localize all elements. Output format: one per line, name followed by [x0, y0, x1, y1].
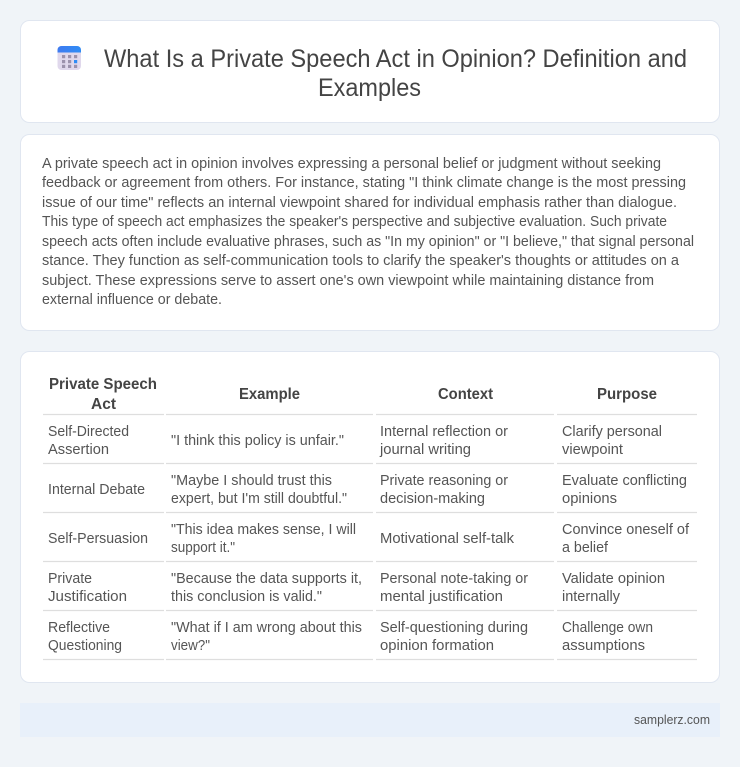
table row: Internal Debate: Private reasoning or: [380, 473, 508, 489]
footer bar: [20, 703, 720, 737]
table row: Self-Directed Assertion: "I think this policy is unfair.": [171, 433, 344, 449]
paragraph text: external influence or debate.: [42, 292, 222, 308]
icon: calendar: [58, 46, 81, 70]
panel: table: [20, 352, 720, 682]
paragraph text: feedback or agreement from others. For instance, stating "I think climate change is the most pressing: [42, 175, 686, 191]
paragraph text: This type of speech act emphasizes the speaker's perspective and subjective evaluation. Such private: [42, 214, 667, 230]
paragraph text: issue of our time" reflects an internal viewpoint shared for individual emphasis rather than dialogue.: [42, 195, 677, 211]
table row: Private Justification: mental justification: [380, 589, 503, 605]
table row: Internal Debate: expert, but I'm still doubtful.": [171, 491, 347, 507]
table header: Purpose: [597, 386, 657, 403]
table row: Private Justification: Justification: [48, 589, 127, 605]
table row: Self-Directed Assertion: Assertion: [48, 442, 109, 458]
paragraph text: stance. They function as self-communication tools to clarify the speaker's thoughts or attitudes on a: [42, 253, 679, 269]
table row: Reflective Questioning: Reflective: [48, 620, 110, 636]
table row: Internal Debate: opinions: [562, 491, 617, 507]
panel: description paragraph: [20, 134, 720, 330]
table row: Private Justification: Personal note-taking or: [380, 571, 528, 587]
title: What Is a Private Speech Act in Opinion? Definition and: [104, 45, 687, 73]
table row: Private Justification: Private: [48, 571, 92, 587]
table row: Reflective Questioning: opinion formation: [380, 638, 494, 654]
table row: Self-Directed Assertion: journal writing: [379, 442, 471, 458]
paragraph text: [42, 156, 694, 308]
table row: Internal Debate: [48, 473, 687, 507]
table row: Private Justification: internally: [562, 589, 621, 605]
footer text: samplerz.com: [634, 713, 710, 727]
table row: Private Justification: [48, 571, 665, 605]
table row: Reflective Questioning: Self-questioning during: [380, 620, 528, 636]
table row: Reflective Questioning: view?": [171, 638, 210, 654]
table row: Internal Debate: "Maybe I should trust this: [171, 473, 332, 489]
table row: Reflective Questioning: "What if I am wrong about this: [171, 620, 362, 636]
table row: Self-Persuasion: [48, 522, 690, 556]
table row: Internal Debate: Evaluate conflicting: [562, 473, 687, 489]
table row: Internal Debate: decision-making: [380, 491, 485, 507]
table row: Self-Persuasion: a belief: [562, 540, 609, 556]
table row: Reflective Questioning: Questioning: [48, 638, 122, 654]
table row: Self-Directed Assertion: [48, 424, 662, 458]
table row: Internal Debate: Internal Debate: [48, 482, 145, 498]
table row: Self-Directed Assertion: viewpoint: [562, 442, 623, 458]
table row: Private Justification: this conclusion is valid.": [171, 589, 322, 605]
title: [104, 45, 687, 102]
table row: Self-Persuasion: support it.": [171, 540, 235, 556]
table row: Reflective Questioning: assumptions: [562, 638, 645, 654]
table row: Self-Directed Assertion: Clarify personal: [562, 424, 662, 440]
paragraph text: speech acts often include evaluative phrases, such as "In my opinion" or "I believe," that signal personal: [42, 234, 694, 250]
header panel: [20, 20, 720, 122]
table header: [49, 376, 657, 413]
table header: Act: [91, 396, 116, 413]
table row: Self-Persuasion: "This idea makes sense, I will: [171, 522, 356, 538]
table header: Private Speech: [49, 376, 157, 393]
table row: Private Justification: "Because the data supports it,: [171, 571, 362, 587]
table header: Example: [239, 386, 300, 403]
paragraph text: A private speech act in opinion involves expressing a personal belief or judgment without seeking: [42, 156, 661, 172]
paragraph text: subject. These expressions serve to assert one's own viewpoint while maintaining distance from: [42, 273, 654, 289]
table row: Private Justification: Validate opinion: [562, 571, 665, 587]
title: Examples: [318, 74, 421, 102]
table row: Reflective Questioning: Challenge own: [562, 620, 653, 636]
table row: Self-Directed Assertion: Self-Directed: [48, 424, 129, 440]
table row: Self-Directed Assertion: Internal reflection or: [380, 424, 508, 440]
table row: Reflective Questioning: [48, 620, 653, 654]
table row: Self-Persuasion: Convince oneself of: [562, 522, 690, 538]
table row: Self-Persuasion: Motivational self-talk: [380, 531, 515, 547]
table header: Context: [438, 386, 493, 403]
table row: Self-Persuasion: Self-Persuasion: [48, 531, 148, 547]
